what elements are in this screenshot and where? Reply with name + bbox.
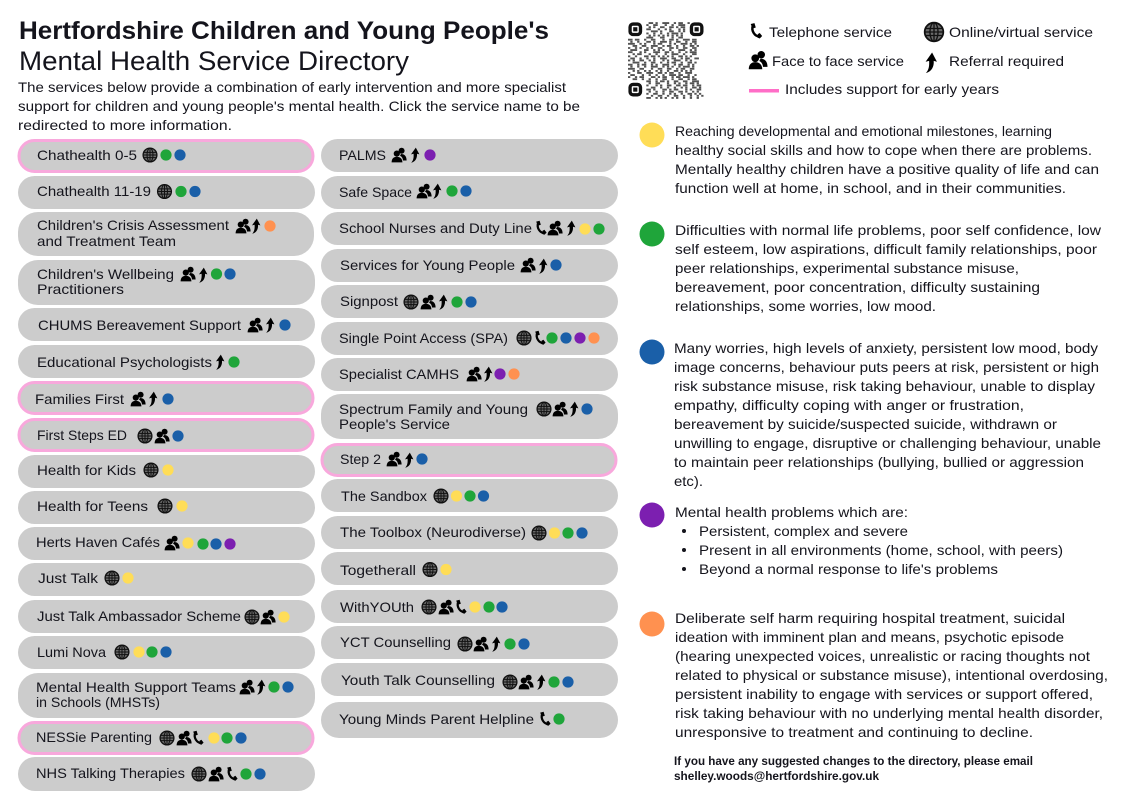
legend: online/virtual service — [925, 23, 1093, 41]
service: Educational Psychologists — [18, 345, 315, 378]
service: NHS Talking Therapies — [18, 757, 315, 791]
service: Services for Young People: Services for Young People — [340, 257, 515, 273]
title — [19, 17, 549, 76]
service: Safe Space — [321, 176, 618, 209]
panel: orange level description: persistent inability to engage with services or support offered, — [675, 686, 1093, 702]
intro text: The services below provide a combination of early intervention and more specialist — [18, 79, 566, 95]
service: Youth Talk Counselling: Youth Talk Counselling — [341, 672, 495, 688]
service: The Sandbox: The Sandbox — [341, 488, 427, 504]
service: The Toolbox (Neurodiverse): The Toolbox (Neurodiverse) — [340, 524, 526, 540]
panel: purple level description — [640, 502, 1063, 577]
service: Lumi Nova — [18, 636, 315, 669]
footer note: shelley.woods@hertfordshire.gov.uk — [674, 771, 880, 783]
service: Single Point Access (SPA) — [321, 322, 618, 355]
service: First Steps ED: First Steps ED — [37, 427, 127, 443]
service: PALMS: PALMS — [339, 147, 386, 163]
service: WithYOUth: WithYOUth — [340, 599, 414, 615]
service: CHUMS Bereavement Support — [18, 308, 315, 341]
service: Specialist CAMHS: Specialist CAMHS — [339, 366, 459, 382]
panel: blue level description — [640, 340, 1101, 489]
panel: yellow level description: function well at home, in school, and in their communities. — [675, 180, 1066, 196]
panel: orange level description — [640, 610, 1108, 740]
panel: blue level description: unwilling to engage, disruptive or challenging behaviour, unable — [674, 435, 1101, 451]
panel: orange level description: (hearing unexpected voices, unrealistic or racing thoughts not — [675, 648, 1090, 664]
intro text — [18, 79, 580, 133]
panel: green level description: relationships, some worries, low mood. — [675, 298, 936, 314]
service: Chathealth 0-5 — [19, 140, 313, 172]
service: Single Point Access (SPA): Single Point Access (SPA) — [339, 330, 508, 346]
service: Mental Health Support Teams in Schools — [18, 673, 315, 718]
service: Children's Crisis Assessment and Treatment Team: Children's Crisis Assessment — [37, 217, 229, 233]
legend: referral required — [926, 53, 1064, 73]
title: Mental Health Service Directory — [19, 46, 410, 76]
service: Spectrum Family and Young People's Service: Spectrum Family and Young — [339, 401, 528, 417]
service: Children's Crisis Assessment and Treatment Team — [18, 212, 314, 256]
panel: green level description: peer relationships, experimental substance misuse, — [675, 260, 1019, 276]
service: Children's Crisis Assessment and Treatment Team: and Treatment Team — [37, 233, 176, 249]
service: Step 2: Step 2 — [340, 451, 381, 467]
service: Children's Wellbeing Practitioners — [18, 260, 315, 305]
service: YCT Counselling — [321, 626, 618, 659]
service: Youth Talk Counselling — [321, 663, 618, 696]
panel: purple level description: Persistent, complex and severe — [699, 523, 908, 539]
service: Just Talk — [18, 563, 315, 596]
service: Herts Haven Cafés: Herts Haven Cafés — [36, 534, 160, 550]
service: Step 2 — [322, 444, 616, 476]
service: Chathealth 0-5: Chathealth 0-5 — [37, 147, 137, 163]
service: Mental Health Support Teams in Schools: Mental Health Support Teams — [36, 679, 236, 695]
service: Signpost — [321, 285, 618, 318]
panel: purple level description: Mental health problems which are: — [675, 504, 908, 520]
legend: telephone service: Telephone service — [769, 24, 892, 40]
service: Specialist CAMHS — [321, 358, 618, 391]
panel: services column one — [18, 140, 315, 791]
service: Services for Young People — [321, 249, 618, 282]
service: Health for Kids — [18, 455, 315, 488]
panel: yellow level description: Mentally healthy children have a positive quality of life and can — [675, 161, 1099, 177]
service: Young Minds Parent Helpline: Young Minds Parent Helpline — [339, 711, 534, 727]
panel: green level description — [640, 222, 1102, 314]
panel: blue level description: etc). — [674, 473, 703, 489]
service: Young Minds Parent Helpline — [321, 702, 618, 738]
service: Spectrum Family and Young People's Service — [321, 394, 618, 439]
service: School Nurses and Duty Line — [321, 212, 618, 245]
panel: blue level description: Many worries, high levels of anxiety, persistent low mood, body — [674, 340, 1098, 356]
service: Just Talk Ambassador Scheme: Just Talk Ambassador Scheme — [37, 608, 241, 624]
panel: purple level description: Beyond a normal response to life's problems — [699, 561, 998, 577]
service: WithYOUth — [321, 590, 618, 623]
service: Signpost: Signpost — [340, 293, 398, 309]
legend: early years line: Includes support for early years — [785, 81, 999, 97]
service: Families First — [19, 382, 313, 414]
panel: green level description: bereavement, poor concentration, difficulty sustaining — [675, 279, 1040, 295]
service: Togetherall: Togetherall — [340, 562, 416, 578]
panel: blue level description: image concerns, behaviour puts peers at risk, persistent or high — [674, 359, 1099, 375]
service: Just Talk Ambassador Scheme — [18, 600, 315, 633]
legend: online/virtual service: Online/virtual service — [949, 24, 1093, 40]
footer note — [674, 756, 1033, 783]
service: Mental Health Support Teams in Schools: in Schools (MHSTs) — [36, 694, 160, 710]
service: The Sandbox — [321, 479, 618, 512]
service: Children's Wellbeing Practitioners: Children's Wellbeing — [37, 266, 174, 282]
service: Togetherall — [321, 552, 618, 585]
panel: orange level description: unresponsive to treatment and continuing to decline. — [675, 724, 1033, 740]
panel: orange level description: ideation with imminent plan and means, psychotic episode — [675, 629, 1064, 645]
service: NESSie Parenting — [19, 722, 313, 754]
panel: orange level description: Deliberate self harm requiring hospital treatment, suicidal — [675, 610, 1065, 626]
service: Educational Psychologists: Educational Psychologists — [37, 354, 212, 370]
service: Chathealth 11-19 — [18, 176, 315, 209]
intro text: redirected to more information. — [18, 117, 232, 133]
footer note: If you have any suggested changes to the directory, please email — [674, 756, 1033, 768]
panel: yellow level description: Reaching developmental and emotional milestones, learning — [675, 123, 1052, 139]
service: Lumi Nova: Lumi Nova — [37, 644, 106, 660]
service: First Steps ED — [19, 420, 313, 450]
panel: purple level description: Present in all environments (home, school, with peers) — [699, 542, 1063, 558]
legend: face to face service: Face to face service — [772, 53, 904, 69]
service: Safe Space: Safe Space — [339, 184, 412, 200]
service: Families First: Families First — [35, 391, 124, 407]
service: YCT Counselling: YCT Counselling — [340, 634, 451, 650]
panel: blue level description: risk substance misuse, risk taking behaviour, unable to display — [674, 378, 1095, 394]
service: CHUMS Bereavement Support: CHUMS Bereavement Support — [38, 317, 241, 333]
legend — [749, 23, 1093, 97]
panel: yellow level description: healthy social skills and how to cope when there are problems. — [675, 142, 1092, 158]
title: Hertfordshire Children and Young People's — [19, 17, 549, 45]
service: Chathealth 11-19: Chathealth 11-19 — [37, 183, 151, 199]
panel: blue level description: empathy, difficulty coping with anger or frustration, — [674, 397, 1024, 413]
service: Just Talk: Just Talk — [38, 570, 99, 586]
intro text: support for children and young people's mental health. Click the service name to be — [18, 98, 580, 114]
panel: blue level description: to maintain peer relationships (bullying, bullied or aggression — [674, 454, 1084, 470]
service: Children's Wellbeing Practitioners: Practitioners — [37, 281, 124, 297]
service: Spectrum Family and Young People's Service: People's Service — [339, 416, 450, 432]
legend: referral required: Referral required — [949, 53, 1064, 69]
panel: orange level description: risk taking behaviour with no underlying mental health disorder, — [675, 705, 1103, 721]
QR code — [628, 23, 704, 98]
service: Health for Teens: Health for Teens — [37, 498, 148, 514]
service: NHS Talking Therapies: NHS Talking Therapies — [36, 765, 185, 781]
service: Health for Teens — [18, 491, 315, 524]
panel: green level description: self esteem, low aspirations, difficult family relationships, poor — [675, 241, 1097, 257]
service: NESSie Parenting: NESSie Parenting — [36, 729, 152, 745]
service: PALMS — [321, 139, 618, 172]
service: Herts Haven Cafés — [18, 527, 315, 560]
service: School Nurses and Duty Line: School Nurses and Duty Line — [339, 220, 532, 236]
service: Health for Kids: Health for Kids — [37, 462, 136, 478]
panel: orange level description: related to physical or substance misuse), intentional overdosing, — [675, 667, 1108, 683]
panel: services column two — [321, 139, 618, 738]
service: The Toolbox (Neurodiverse) — [321, 516, 618, 549]
panel: yellow level description — [640, 122, 1099, 196]
panel: green level description: Difficulties with normal life problems, poor self confidence, low — [675, 222, 1102, 238]
panel: blue level description: bereavement by suicide/suspected suicide, withdrawn or — [674, 416, 1057, 432]
